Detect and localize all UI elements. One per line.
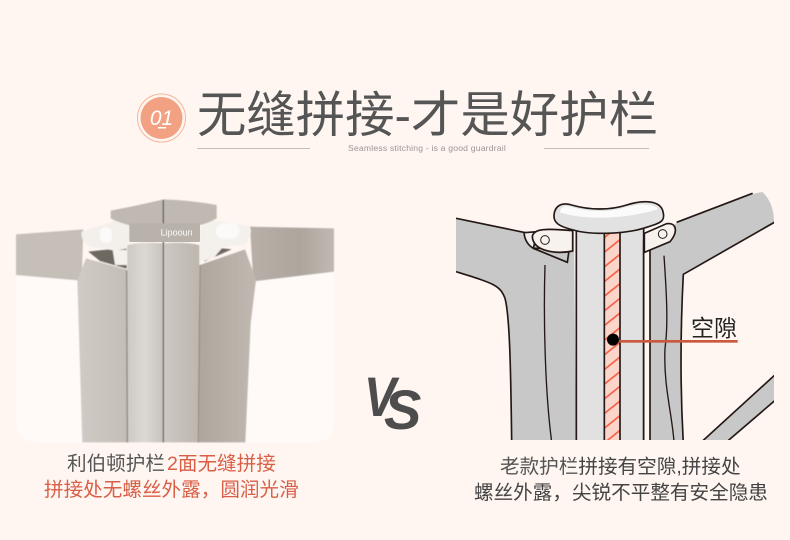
illustration: left clip	[524, 229, 573, 262]
photo: logo strap	[129, 223, 200, 242]
subtitle with side rules: Seamless stitching - is a good guardrail	[348, 143, 506, 153]
right caption	[474, 456, 768, 504]
photo: seamless guardrail	[16, 192, 774, 443]
illustration: right arm	[650, 188, 783, 443]
VS mark	[364, 365, 421, 441]
callout label: gap: 空隙	[691, 315, 737, 341]
illustration: old guardrail with gap	[456, 188, 783, 445]
callout: gap pointer	[607, 334, 738, 346]
photo: hinge gap	[88, 247, 232, 269]
VS mark: V	[364, 365, 396, 428]
VS mark: S	[384, 378, 421, 441]
left caption: 拼接处无螺丝外露，圆润光滑	[44, 479, 299, 501]
photo: seams	[127, 200, 200, 442]
illustration: gap strip	[605, 233, 620, 442]
photo: centre right column	[164, 243, 199, 442]
badge: 01: 01	[150, 107, 173, 130]
illustration: top cap	[554, 202, 664, 233]
right caption: 螺丝外露，尖锐不平整有安全隐患	[474, 482, 768, 504]
photo: white clips	[81, 220, 251, 265]
title: 无缝拼接-才是好护栏	[197, 88, 658, 143]
right caption: 老款护栏拼接有空隙,拼接处	[500, 456, 741, 478]
photo: logo strap: Lipooun	[161, 227, 193, 237]
photo: mesh background	[16, 270, 334, 442]
photo: left rail	[16, 229, 83, 281]
illustration: right clip	[644, 224, 675, 252]
photo: centre left column	[127, 243, 163, 442]
illustration: lower right rail	[702, 374, 774, 440]
photo: right rail	[250, 227, 334, 281]
photo: top cap	[111, 199, 217, 225]
illustration: fold lines	[544, 256, 674, 442]
photo: right pad	[198, 249, 256, 442]
illustration: centre columns	[576, 228, 650, 445]
left caption: 利伯顿护栏2面无缝拼接	[67, 453, 276, 475]
photo: left pad	[77, 258, 127, 442]
illustration: left arm	[456, 218, 576, 442]
left caption	[44, 453, 299, 501]
